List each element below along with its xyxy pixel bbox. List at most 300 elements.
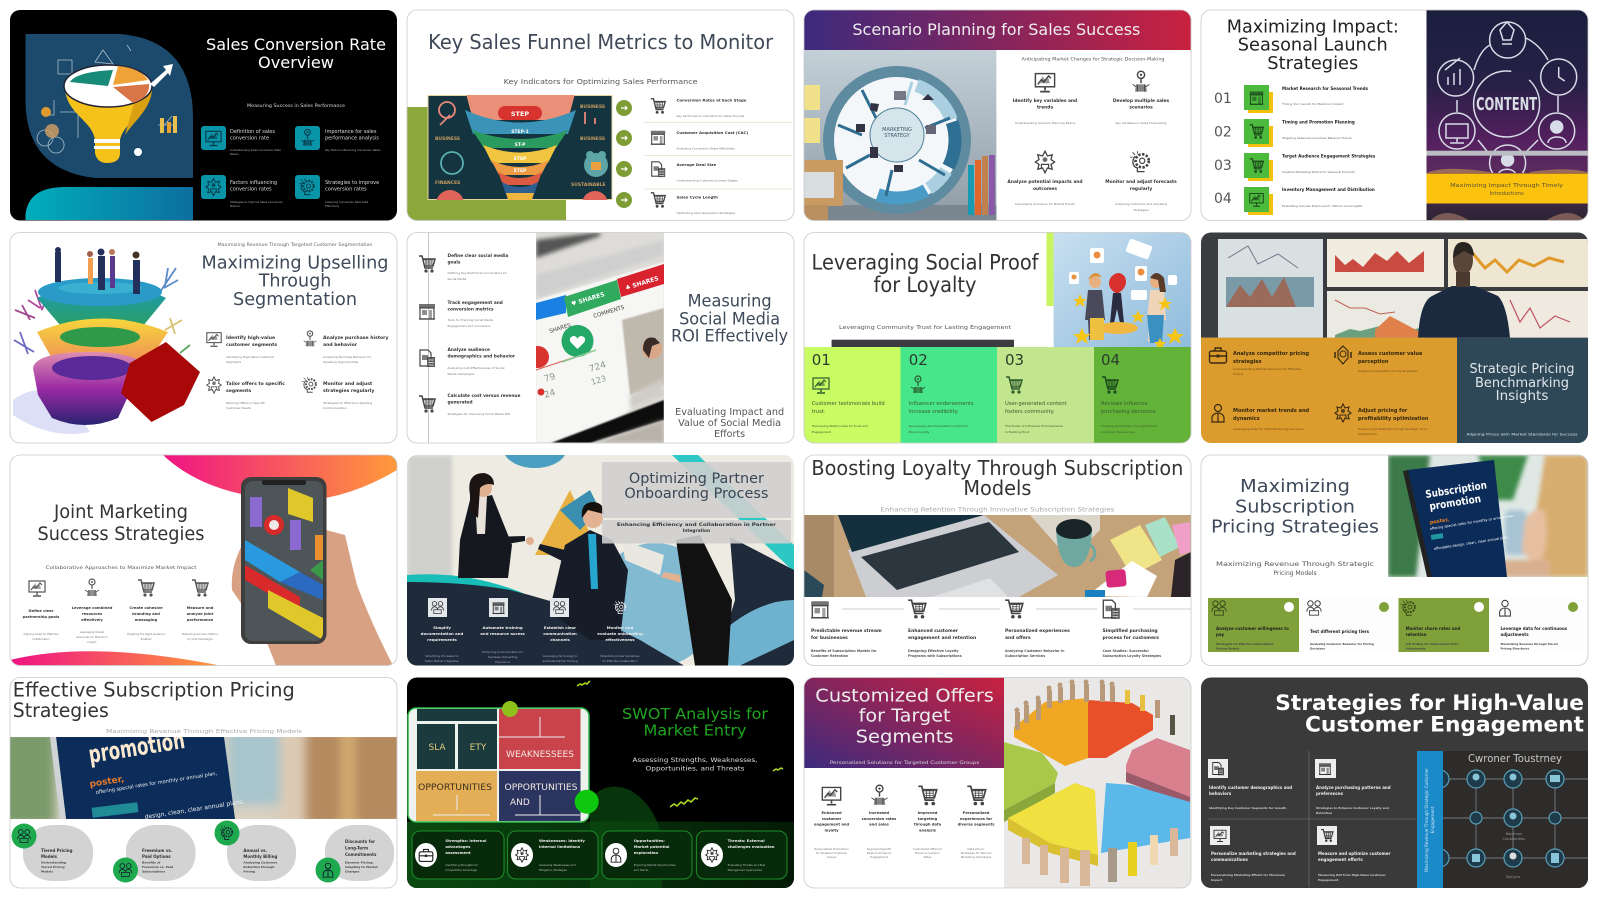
title bbox=[1470, 361, 1574, 404]
slide: Strategic Pricing Benchmarking bbox=[1201, 232, 1588, 443]
subtitle: Leveraging Community Trust for Lasting Engagement bbox=[839, 325, 1012, 331]
subtitle box bbox=[602, 520, 791, 544]
timeline items: Define clear social media bbox=[448, 253, 508, 259]
subtitle: Measuring Success in Sales Performance bbox=[247, 103, 345, 109]
strategy quadrants: communications bbox=[1211, 857, 1248, 862]
metric list: Analyzing Conversion Rates Effectively bbox=[676, 146, 735, 150]
title: Maximizing bbox=[1240, 476, 1350, 497]
title bbox=[202, 253, 388, 310]
photo: social media metrics screen: 724 bbox=[588, 360, 608, 375]
image: customer journey map: Cwroner Toustrney bbox=[1468, 753, 1562, 765]
benefit items bbox=[811, 600, 1191, 658]
scenario items: Developing Scenarios for Market Trends bbox=[1015, 202, 1075, 206]
slide: Seasonal Launch Strategies bbox=[1201, 10, 1590, 221]
subtitle: Assessing Strengths, Weaknesses, bbox=[632, 757, 758, 764]
onboarding items: evaluate onboarding bbox=[597, 631, 643, 636]
pricing pills: Tiered Pricing bbox=[41, 848, 73, 853]
subtitle box: Integration bbox=[683, 528, 710, 534]
numbered columns: trust. bbox=[812, 409, 826, 415]
pricing pills: Understanding bbox=[41, 860, 66, 864]
pricing pills: Tiered Pricing bbox=[41, 865, 65, 869]
SWOT cards: Market potential bbox=[634, 844, 669, 849]
pricing tiles: Test different pricing tiers bbox=[1310, 629, 1370, 634]
title: Social Media bbox=[679, 310, 780, 330]
subtitle: Value of Social Media bbox=[678, 418, 781, 429]
SWOT cards: Management Approaches bbox=[728, 868, 763, 872]
offer items: Rates bbox=[924, 855, 932, 859]
strategy quadrants: Measure and optimize customer bbox=[1318, 851, 1391, 856]
numbered list: Market Research for Seasonal Trends bbox=[1282, 86, 1369, 91]
numbered columns: Brand Loyalty bbox=[909, 430, 930, 434]
slide: Measuring Social Media ROI bbox=[407, 232, 794, 443]
strategy quadrants: Impact bbox=[1211, 878, 1223, 882]
numbered columns: Customer testimonials build bbox=[812, 401, 885, 407]
SWOT cards: Threats: External bbox=[728, 838, 765, 843]
scenario items: regularly bbox=[1130, 186, 1152, 192]
vertical blue band: Maximizing Revenue Through Strategic Customer bbox=[1424, 768, 1429, 872]
photo: social media metrics screen: 24 bbox=[543, 388, 557, 401]
numbered columns: Harnessing Testimonials for Trust and bbox=[812, 424, 868, 428]
green band bbox=[407, 787, 794, 889]
numbered list: Evaluating Success Post-Launch: Metrics and Insights bbox=[1282, 204, 1363, 208]
squiggles bbox=[577, 681, 783, 807]
pricing tiles: Pricing Structures bbox=[1500, 646, 1529, 650]
pricing items: Analyze competitor pricing bbox=[1233, 351, 1310, 357]
illustration: content cycle bbox=[1426, 10, 1590, 221]
pricing tiles: A/B Testing for Subscription Price bbox=[1406, 642, 1459, 646]
pricing tiles: Pricing Models bbox=[1216, 646, 1240, 650]
title bbox=[815, 686, 994, 748]
numbered list: Inventory Management and Distribution bbox=[1282, 187, 1375, 192]
timeline items bbox=[419, 232, 520, 443]
pricing tiles: Strategies for Effective Subscription bbox=[1216, 642, 1273, 646]
illustration: marketing strategy wheel bbox=[804, 50, 996, 221]
vertical blue band: Engagement bbox=[1430, 806, 1435, 833]
offer items: Improved bbox=[918, 811, 938, 815]
title bbox=[622, 705, 769, 740]
timeline items: Defining Key Performance Indicators for bbox=[448, 271, 508, 275]
strategy items: Impact bbox=[88, 640, 96, 644]
numbered columns: Leveraging User-Generated Content for bbox=[909, 424, 969, 428]
photo: social media metrics screen: 123 bbox=[590, 374, 607, 387]
items: Segments bbox=[226, 360, 242, 364]
onboarding items: Simplify bbox=[433, 625, 451, 630]
onboarding items bbox=[421, 598, 643, 664]
SWOT cards: internal limitations bbox=[539, 844, 581, 849]
pricing pills: Pricing bbox=[243, 870, 255, 874]
pricing pills: Monthly Billing bbox=[243, 854, 277, 859]
pricing pills: Benefits of bbox=[142, 860, 161, 864]
numbered columns: 01 bbox=[812, 351, 831, 369]
pricing items: Pricing bbox=[1233, 372, 1243, 376]
title bbox=[1211, 476, 1379, 538]
offer items: and sales bbox=[869, 823, 890, 827]
strategy quadrants: Measuring ROI from High-Value Customer bbox=[1318, 873, 1386, 877]
offer items: for Targeted Customer bbox=[816, 851, 848, 855]
SWOT cards: exploration bbox=[634, 850, 659, 855]
timeline items: generated bbox=[448, 400, 473, 406]
subtitle: Maximizing Revenue Through Targeted Customer Segmentation bbox=[218, 242, 373, 247]
items: Strategies for Effective Upselling bbox=[323, 401, 372, 405]
items: Tailor offers to specific bbox=[226, 381, 285, 387]
slide: Maximizing Subscription Pricing bbox=[1201, 455, 1588, 666]
benefit items: and offers bbox=[1005, 635, 1031, 641]
pricing pills: Annual vs. bbox=[243, 848, 267, 853]
strategy items: resources bbox=[82, 612, 103, 616]
onboarding items: Seamless Onboarding bbox=[488, 655, 518, 659]
subtitle: Pricing Models bbox=[1273, 570, 1317, 577]
callout: Maximizing Impact Through Timely bbox=[1450, 183, 1563, 189]
title box: Optimizing Partner bbox=[629, 470, 764, 487]
numbered columns: User-generated content bbox=[1005, 401, 1067, 407]
scenario items: outcomes bbox=[1033, 186, 1057, 192]
funnel illustration: FINANCES bbox=[435, 180, 460, 186]
scenario items: Analyzing Outcomes and Adjusting bbox=[1115, 202, 1167, 206]
photo: social media metrics screen: COMMENTS bbox=[593, 305, 626, 320]
title: Subscription bbox=[1235, 497, 1355, 518]
photo: tablet close-up: poster, bbox=[89, 775, 125, 790]
title: Through bbox=[258, 272, 331, 292]
pricing items: perception bbox=[1358, 359, 1389, 365]
timeline items: conversion metrics bbox=[448, 306, 494, 312]
photo: social media metrics screen: ♥ SHARES bbox=[571, 291, 606, 308]
items: Monitor and adjust bbox=[323, 381, 373, 387]
onboarding items: Establish clear bbox=[544, 625, 576, 630]
funnel illustration: STEP bbox=[514, 156, 527, 162]
item grid with icons: Definition of sales bbox=[230, 129, 275, 135]
offer items: analysis bbox=[919, 828, 937, 832]
photo: tablet close-up: design, clean, clear annual plans, bbox=[144, 798, 245, 821]
subtitle: Enhancing Retention Through Innovative Subscription Strategies bbox=[880, 508, 1114, 514]
slide: Leveraging Social Proof bbox=[804, 232, 1191, 443]
illustration: social proof people bbox=[1054, 232, 1191, 349]
offer items: Data-Driven bbox=[968, 847, 985, 851]
title: Pricing Strategies bbox=[1211, 517, 1379, 538]
item grid with icons: conversion rates bbox=[325, 186, 367, 192]
timeline items: Strategies for Improving Social Media ROI bbox=[448, 412, 510, 416]
vertical blue band bbox=[1417, 751, 1443, 888]
photo: social media metrics screen: ♣ SHARES bbox=[625, 275, 660, 292]
strategy items: performance bbox=[187, 618, 214, 622]
funnel illustration: ST-P bbox=[515, 142, 526, 148]
pricing pills: Models bbox=[41, 870, 53, 874]
image: customer journey map: Siplyyra bbox=[1506, 875, 1520, 879]
pricing pills: Changes bbox=[345, 870, 360, 874]
onboarding items: Experience bbox=[495, 660, 510, 664]
SWOT matrix image: OPPORTUNITIES bbox=[504, 783, 578, 793]
items: Analyzing Purchase Behavior for bbox=[323, 355, 372, 359]
title: Strategies bbox=[1267, 54, 1358, 74]
scenario items: trends bbox=[1037, 104, 1053, 110]
timeline items: Social Media bbox=[448, 277, 467, 281]
slide: Effective Subscription Pricing bbox=[0, 678, 405, 888]
SWOT matrix image bbox=[408, 701, 599, 822]
numbered columns bbox=[804, 347, 1191, 443]
onboarding items: Simplifying Processes for bbox=[425, 654, 460, 658]
metric list: Optimizing Lead Generation Strategies bbox=[676, 211, 735, 215]
strategy items: for Joint Campaigns bbox=[187, 637, 213, 641]
title box bbox=[602, 462, 791, 518]
callout bbox=[1450, 183, 1563, 195]
pricing items: Analyzing Competitor Pricing Strategies bbox=[1358, 369, 1418, 373]
title: Segments bbox=[856, 727, 954, 748]
item grid with icons: Strategies to Improve Sales Conversion bbox=[230, 200, 283, 204]
title: Key Sales Funnel Metrics to Monitor bbox=[428, 30, 774, 54]
offer items: Enhanced bbox=[821, 811, 842, 815]
SWOT cards: Opportunities: bbox=[634, 838, 665, 843]
benefit items: Personalized experiences bbox=[1005, 628, 1070, 634]
timeline items: Analyze audience bbox=[448, 347, 490, 353]
scenario items: Key Variables in Sales Forecasting bbox=[1115, 121, 1167, 125]
item grid with icons: conversion rate bbox=[230, 136, 269, 142]
strategy items: Resources for Maximum bbox=[76, 635, 108, 639]
SWOT cards: Identifying Strengths for bbox=[445, 863, 479, 867]
benefit items: Benefits of Subscription Models for bbox=[811, 649, 877, 653]
accent bar bbox=[1046, 232, 1054, 306]
strategy quadrants: engagement efforts bbox=[1318, 857, 1363, 862]
subtitle: Evaluating Impact and bbox=[675, 407, 784, 418]
SWOT matrix image: AND bbox=[510, 798, 530, 808]
items: segments bbox=[226, 388, 252, 394]
strategy items: Leveraging Shared bbox=[80, 630, 105, 634]
SWOT cards: challenges evaluation bbox=[728, 844, 775, 849]
item grid with icons: Metrics bbox=[230, 204, 240, 208]
numbered list: 01 bbox=[1214, 91, 1232, 107]
items: Communication bbox=[323, 406, 347, 410]
pricing items: Understanding Market Dynamics for Effective bbox=[1233, 367, 1301, 371]
title bbox=[13, 679, 295, 722]
pricing items: profitability optimization bbox=[1358, 416, 1429, 422]
SWOT cards: Evaluating Threats and Risk bbox=[728, 863, 766, 867]
SWOT cards: Assessing Weaknesses and bbox=[539, 863, 576, 867]
onboarding items: Enhancing Communication for bbox=[482, 650, 524, 654]
strategy items: Measure and bbox=[187, 606, 214, 610]
offer items: Segment-Specific bbox=[867, 847, 892, 851]
scenario items: Identify key variables and bbox=[1013, 98, 1077, 104]
pricing pills: Subscriptions bbox=[142, 870, 165, 874]
offer items: Groups bbox=[827, 855, 837, 859]
photo: tablet with subscription promotion: offering special rates for monthly or annual plan, bbox=[1430, 514, 1515, 531]
offer items: customer bbox=[822, 817, 842, 821]
pricing tiles: Adjustments bbox=[1406, 646, 1426, 650]
benefit items: Subscription Services bbox=[1005, 654, 1045, 658]
numbered list: Target Audience Engagement Strategies bbox=[1282, 154, 1376, 158]
benefit items: Analyzing Customer Behavior in bbox=[1005, 649, 1065, 653]
illustration: segmented pie with people bbox=[1004, 678, 1191, 888]
benefit items: Enhanced customer bbox=[908, 628, 959, 634]
title: Insights bbox=[1496, 388, 1548, 404]
pricing tiles: Maximizing Revenue through Tiered bbox=[1500, 642, 1558, 646]
strategy items: Aligning Goals for Effective bbox=[23, 632, 59, 636]
strategy items: partnership goals bbox=[23, 615, 60, 619]
photo: laptop on desk bbox=[804, 515, 1191, 600]
offer items: diverse segments bbox=[958, 823, 995, 827]
subtitle bbox=[1216, 561, 1374, 577]
offer items: Deals to Enhance bbox=[867, 851, 892, 855]
header band bbox=[804, 10, 1191, 50]
slide: Optimizing Partner Onboarding bbox=[407, 455, 794, 667]
photo: tablet with subscription promotion: affordable design, clean, clear annual plan, bbox=[1434, 535, 1509, 551]
numbered list: Targeting Seasonal Consumer Behavior Trends bbox=[1281, 136, 1352, 140]
numbered columns: The Power of Influencer Endorsements bbox=[1004, 424, 1063, 428]
item grid with icons: Importance for sales bbox=[325, 129, 377, 135]
title: Scenario Planning for Sales Success bbox=[852, 20, 1140, 39]
offer items: Marketing Campaigns bbox=[961, 855, 992, 859]
strategy quadrants: Identifying Key Customer Segments for Growth bbox=[1209, 806, 1286, 810]
metric list: Average Deal Size bbox=[676, 162, 716, 167]
SWOT cards: Competitive Advantage bbox=[445, 868, 477, 872]
slide: Customized Offers bbox=[804, 678, 1191, 888]
illustration: layered funnel with people bbox=[13, 247, 200, 434]
pricing items: Leveraging Data for Informed Pricing Decisions bbox=[1233, 427, 1304, 431]
title: for Target bbox=[859, 706, 951, 727]
item grid with icons: Analyzing Conversion Rate Data bbox=[325, 200, 369, 204]
offer items: Engagement bbox=[870, 855, 889, 859]
pricing items bbox=[1210, 346, 1429, 436]
title: Models bbox=[963, 476, 1031, 500]
timeline items: demographics and behavior bbox=[448, 354, 516, 360]
funnel illustration: STEP bbox=[514, 168, 527, 174]
timeline items: Calculate cost versus revenue bbox=[448, 393, 520, 399]
title bbox=[38, 502, 204, 545]
funnel illustration: BUSINESS bbox=[580, 104, 605, 110]
illustration: marketing strategy wheel: STRATEGY bbox=[884, 133, 911, 139]
pricing tiles: adjustments bbox=[1500, 632, 1529, 637]
title: Market Entry bbox=[644, 722, 746, 740]
scenario items: Understanding Scenario Planning Basics bbox=[1015, 121, 1076, 125]
item grid with icons: Effectively bbox=[325, 204, 339, 208]
onboarding items: Establishing Clear Guidelines bbox=[600, 654, 640, 658]
slide: Boosting Loyalty bbox=[804, 455, 1191, 666]
offer items: loyalty bbox=[825, 828, 839, 832]
subtitle box: Enhancing Efficiency and Collaboration in Partner bbox=[617, 522, 777, 528]
timeline items: Media Campaigns bbox=[448, 372, 475, 376]
numbered columns: in Building Trust bbox=[1005, 430, 1030, 434]
subtitle bbox=[676, 408, 784, 437]
benefit items: process for customers bbox=[1102, 635, 1159, 641]
SWOT cards: Exploring Market Opportunities bbox=[634, 863, 676, 867]
benefit items: Subscription Loyalty Strategies bbox=[1102, 654, 1161, 658]
strategy items: Create cohesive bbox=[129, 606, 163, 610]
numbered list bbox=[1214, 85, 1376, 215]
title: Measuring bbox=[688, 292, 772, 312]
offer items: through data bbox=[914, 823, 942, 827]
title bbox=[812, 250, 1039, 297]
offer items: Strategies for Tailored bbox=[961, 851, 992, 855]
benefit items: Case Studies: Successful bbox=[1102, 649, 1149, 653]
benefit items: Customer Retention bbox=[811, 654, 849, 658]
SWOT matrix image: ETY bbox=[470, 743, 487, 753]
scenario items: Develop multiple sales bbox=[1113, 98, 1170, 104]
metric list bbox=[616, 98, 792, 215]
items: Analyze purchase history bbox=[323, 335, 388, 341]
strategy items: Together bbox=[140, 637, 153, 641]
strategy items: messaging bbox=[135, 618, 158, 622]
pricing pills: Adapting to Market bbox=[345, 865, 378, 869]
offer items: engagement and bbox=[814, 823, 850, 827]
numbered columns: 03 bbox=[1005, 351, 1024, 369]
slide: Key Sales Funnel Metrics bbox=[407, 34, 792, 220]
slide: Joint Marketing bbox=[10, 455, 397, 666]
callout: Introductions bbox=[1490, 191, 1524, 197]
title: Maximizing Impact: bbox=[1227, 18, 1399, 38]
items: Identify high-value bbox=[226, 335, 275, 341]
numbered columns: purchasing decisions. bbox=[1101, 409, 1157, 415]
image: customer journey map bbox=[1431, 751, 1588, 888]
strategy quadrants: Retention bbox=[1316, 811, 1332, 815]
numbered columns: Reviews influence bbox=[1101, 401, 1148, 407]
funnel illustration: BUSINESS bbox=[580, 136, 605, 142]
offer items: Personalized bbox=[963, 811, 990, 815]
photo: analyst facing chart wall bbox=[1201, 232, 1588, 338]
title: Sales Conversion Rate bbox=[206, 35, 386, 54]
subtitle: Collaborative Approaches to Maximize Market Impact bbox=[46, 565, 197, 571]
onboarding items: Automate training bbox=[482, 625, 523, 630]
subtitle: Maximizing Revenue Through Strategic bbox=[1216, 561, 1374, 568]
timeline items: Analyzing Cost-Effectiveness of Social bbox=[448, 366, 505, 370]
title: Overview bbox=[258, 53, 334, 72]
pricing tiles: Analyze customer willingness to bbox=[1216, 626, 1289, 631]
pricing pills: Freemium vs. Paid bbox=[142, 865, 173, 869]
strategy quadrants: Identify customer demographics and bbox=[1209, 785, 1292, 790]
subtitle: Key Indicators for Optimizing Sales Performance bbox=[504, 78, 698, 86]
SWOT cards: advantages bbox=[445, 844, 471, 849]
items: and behavior bbox=[323, 342, 358, 348]
item grid with icons: conversion rates bbox=[230, 186, 272, 192]
metric list: Sales Cycle Length bbox=[676, 194, 718, 200]
numbered columns: 02 bbox=[909, 351, 928, 369]
strategy quadrants: Personalizing Marketing Efforts for Maximum bbox=[1211, 873, 1285, 877]
strategy items: Define clear bbox=[29, 609, 54, 613]
numbered columns: Influencer endorsements bbox=[909, 401, 974, 407]
illustration: content cycle: CONTENT bbox=[1476, 94, 1538, 115]
header panel bbox=[804, 678, 1004, 768]
slide: High-Value Customer Engagement bbox=[1201, 678, 1588, 888]
strategy items: Targeting the Right Audience bbox=[127, 632, 165, 636]
pricing pills: Freemium vs. bbox=[142, 848, 173, 853]
SWOT cards: Weaknesses: Identify bbox=[539, 838, 585, 843]
strategy items: analyze joint bbox=[187, 612, 214, 616]
onboarding items: for Effective Collaboration bbox=[602, 659, 638, 663]
strategy quadrants: Analyze purchasing patterns and bbox=[1316, 785, 1391, 790]
metric list: Customer Acquisition Cost (CAC) bbox=[676, 130, 748, 135]
onboarding items: Faster Partner Integration bbox=[425, 659, 460, 663]
onboarding items: Monitor and bbox=[607, 625, 634, 630]
pricing pills: Long-Term bbox=[345, 846, 368, 850]
subtitle: Personalized Solutions for Targeted Customer Groups bbox=[830, 760, 980, 766]
strategy items bbox=[23, 579, 219, 644]
funnel illustration: SUSTAINABLE bbox=[571, 182, 606, 188]
title: Customer Engagement bbox=[1305, 713, 1584, 737]
numbered columns: Engagement bbox=[812, 430, 832, 434]
title bbox=[207, 38, 386, 68]
photo: social media metrics screen: SHARES bbox=[549, 323, 572, 335]
illustration: marketing strategy wheel: MARKETING bbox=[882, 127, 912, 133]
strategy quadrants: Personalize marketing strategies and bbox=[1211, 851, 1296, 856]
funnel illustration bbox=[428, 95, 612, 200]
metric list: Conversion Rates at Each Stage bbox=[676, 98, 747, 102]
dark title panel bbox=[1457, 338, 1588, 443]
items bbox=[207, 331, 388, 410]
title: Strategies for High-Value bbox=[1275, 691, 1584, 715]
subtitle: Opportunities, and Threats bbox=[646, 766, 744, 773]
pricing items: Adjust pricing for bbox=[1358, 408, 1408, 414]
slide: Maximizing Upselling bbox=[13, 242, 388, 434]
item grid with icons: Key Factors Influencing Conversion Rates bbox=[325, 148, 381, 152]
strategy quadrants bbox=[1208, 751, 1417, 887]
photo: tablet close-up: offering special rates for monthly or annual plan, bbox=[95, 771, 218, 796]
title bbox=[671, 292, 788, 347]
